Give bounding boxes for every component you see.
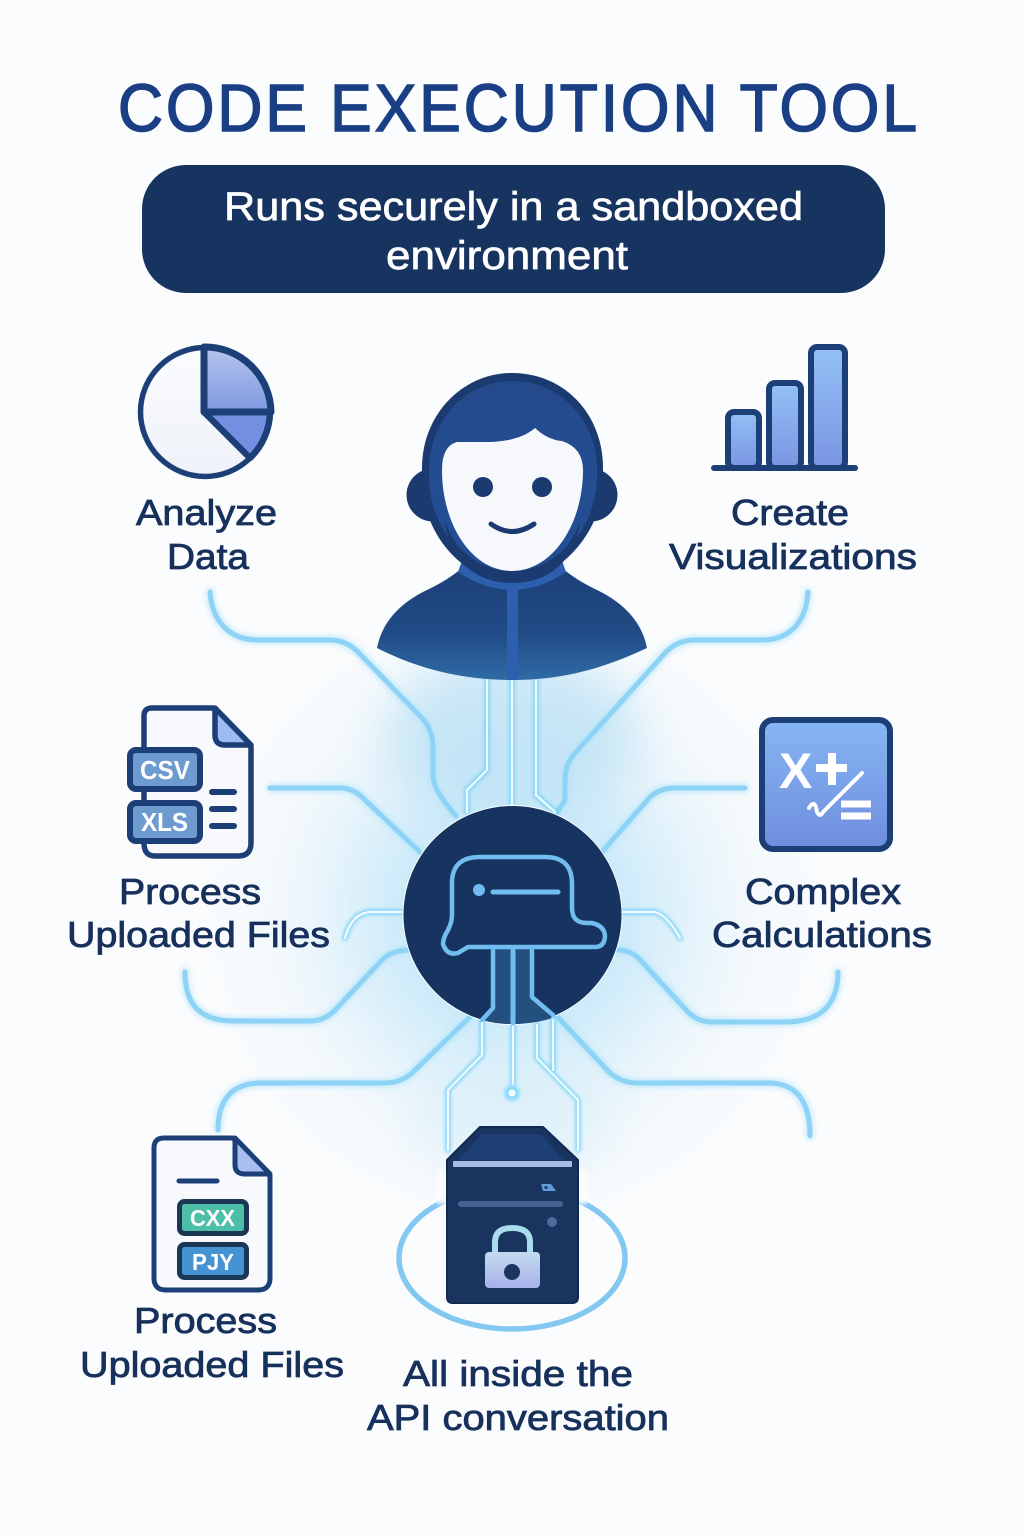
label: create visualizations: Visualizations [669,536,917,577]
label: create visualizations [669,492,917,577]
central circle: code chat icon [402,805,622,1025]
subtitle banner: environment [386,234,628,278]
icon: math calculations [762,720,890,849]
label: complex calculations [712,871,932,955]
icon: csv and xls document [130,708,251,856]
icon: bar chart [714,347,855,468]
label: complex calculations: Calculations [712,914,932,955]
icon: pie chart [140,347,271,476]
label: process uploaded files (upper): Process [119,871,261,912]
icon: cxx and pjy document [154,1138,270,1290]
background glow [172,575,852,1255]
label: analyze data [136,492,277,577]
icon: cxx and pjy document: CXX [190,1205,236,1231]
icon: csv and xls document: CSV [140,755,191,785]
label: process uploaded files (upper): Uploaded Files [67,914,330,955]
label: create visualizations: Create [731,492,849,533]
icon: secured server with ring [399,1127,625,1329]
label: process uploaded files (upper) [67,871,330,955]
label: analyze data: Analyze [136,492,277,533]
label: complex calculations: Complex [745,871,901,912]
label: analyze data: Data [167,536,250,577]
subtitle banner: Runs securely in a sandboxed [224,185,803,229]
subtitle banner [142,165,885,293]
icon: cxx and pjy document: PJY [192,1249,234,1275]
connector lines: thick blue [185,592,838,1150]
label: all inside the api conversation: API conversation [367,1397,669,1438]
label: all inside the api conversation [367,1353,669,1438]
icon: person with headset [377,373,647,680]
icon: math calculations: X [779,743,812,799]
label: process uploaded files (lower) [80,1300,344,1385]
icon: csv and xls document: XLS [141,807,188,837]
label: process uploaded files (lower): Uploaded Files [80,1344,344,1385]
title: CODE EXECUTION TOOL [118,70,920,145]
label: process uploaded files (lower): Process [134,1300,277,1341]
label: all inside the api conversation: All inside the [403,1353,633,1394]
